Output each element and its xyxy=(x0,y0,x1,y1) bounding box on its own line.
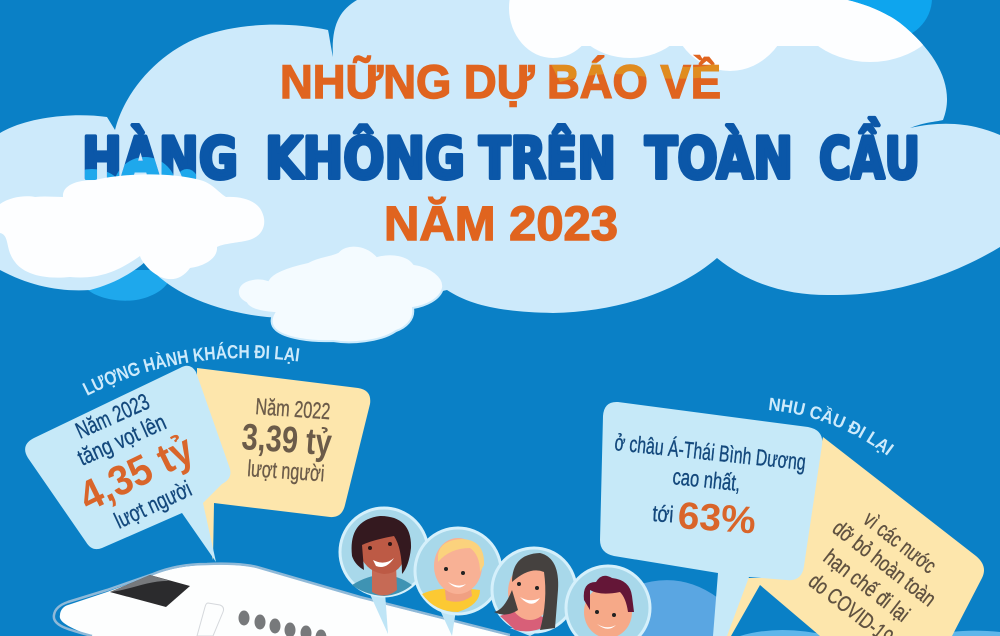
cloud: small white xyxy=(238,246,443,342)
globe patch xyxy=(635,580,718,636)
title line 2: HÀNG xyxy=(82,124,238,192)
title shading: cloud over letters xyxy=(62,62,722,223)
airplane xyxy=(54,564,510,636)
panel: 2023 bubble xyxy=(25,366,230,562)
cockpit window xyxy=(110,575,190,607)
text: lượt người: lượt người xyxy=(110,475,195,534)
windows xyxy=(238,610,326,636)
cloud: white top xyxy=(509,0,950,71)
text: lượt người: lượt người xyxy=(247,455,325,486)
cloud: main light blue xyxy=(0,0,1000,318)
cloud: cyan shade below left cloud xyxy=(88,270,172,301)
number: 3,39 tỷ: 3,39 tỷ xyxy=(240,416,333,463)
title line 1: NHỮNG DỰ BÁO VỀ xyxy=(280,55,721,108)
cloud: cyan patch top right xyxy=(844,0,932,40)
title line 3: NĂM 2023 xyxy=(384,197,618,251)
avatar: woman with long hair xyxy=(492,548,576,636)
text: location: ở châu Á-Thái Bình Dương xyxy=(613,429,807,475)
text: vì các nước: vì các nước xyxy=(859,506,941,578)
door xyxy=(197,603,224,636)
text: tới: tới xyxy=(652,500,674,527)
number: 4,35 tỷ: 4,35 tỷ xyxy=(71,425,201,520)
heading: passenger volume: LƯỢNG HÀNH KHÁCH ĐI LẠI xyxy=(82,342,300,396)
text: tăng vọt lên: tăng vọt lên xyxy=(73,409,170,471)
title line 2: TRÊN xyxy=(479,124,616,192)
text: năm 2023: Năm 2023 xyxy=(71,388,153,444)
text: cao nhất: cao nhất, xyxy=(671,463,742,496)
title line 2: CẦU xyxy=(819,117,920,192)
avatar: blond man xyxy=(415,528,501,636)
text: dỡ bỏ hoàn toàn: dỡ bỏ hoàn toàn xyxy=(828,515,941,611)
heading: travel demand: NHU CẦU ĐI LẠI xyxy=(769,398,894,456)
bottom right cloud strip xyxy=(740,630,1000,636)
cloud: white left xyxy=(0,174,264,279)
title line 2: TOÀN xyxy=(645,124,793,192)
panel: Asia-Pacific bubble xyxy=(600,402,822,636)
title xyxy=(82,55,920,251)
panel: reason bubble xyxy=(725,437,984,636)
title line 2: KHÔNG xyxy=(265,124,465,192)
title line 2 xyxy=(82,117,920,192)
avatar: young man xyxy=(566,566,650,636)
fuselage xyxy=(60,565,510,636)
number: 63%: 63% xyxy=(676,495,757,542)
fuselage outline xyxy=(54,564,510,636)
avatar: woman with dark hair xyxy=(340,508,428,634)
panel: 2022 bubble xyxy=(196,368,370,560)
text: năm 2022: Năm 2022 xyxy=(255,393,331,424)
